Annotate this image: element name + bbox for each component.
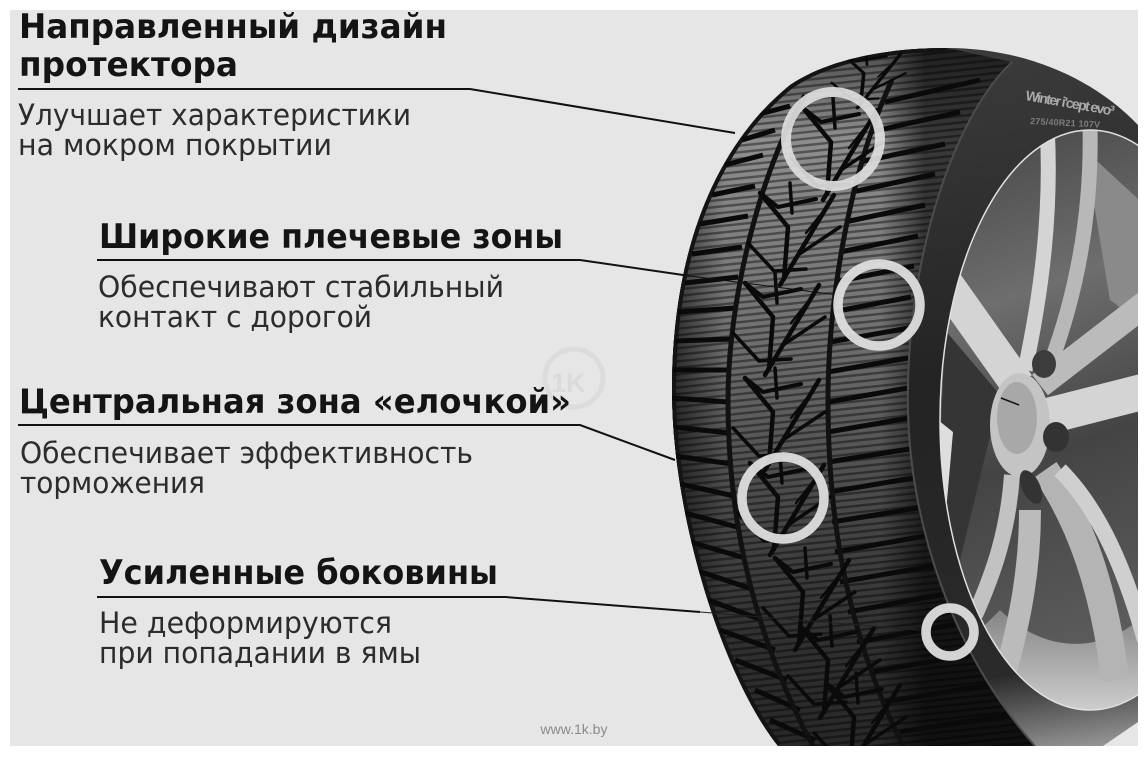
callout line 1 <box>18 89 735 133</box>
tire sidewall <box>672 48 1138 746</box>
website footer: www.1k.by <box>540 721 607 737</box>
heading 2: Широкие плечевые зоны <box>99 217 563 257</box>
block 1: directional tread <box>18 7 447 162</box>
block 3: center zone <box>19 382 571 500</box>
ring: center zone <box>742 457 824 539</box>
sidewall brand text: 275/40R21 107V <box>1030 116 1100 130</box>
callout line 4 <box>97 597 700 612</box>
description 4: Не деформируются <box>99 606 392 640</box>
outer tread edge <box>672 48 947 746</box>
center herringbone chevrons <box>733 47 906 757</box>
sidewall brand text <box>1026 90 1115 128</box>
callout line 2 on tire <box>690 276 838 295</box>
ring: tread design <box>786 92 880 186</box>
watermark logo <box>545 349 603 407</box>
heading 1: Направленный дизайн <box>19 7 447 47</box>
description 2: Обеспечивают стабильный <box>98 270 504 304</box>
description 2 second line: контакт с дорогой <box>98 300 372 334</box>
tread band <box>672 48 1034 746</box>
heading 1 second line: протектора <box>19 45 238 85</box>
watermark logo: 1K <box>551 368 586 398</box>
heading 3: Центральная зона «елочкой» <box>19 382 571 422</box>
sidewall bead line <box>908 62 1035 746</box>
alloy wheel <box>938 125 1148 720</box>
description 3: Обеспечивает эффективность <box>20 436 473 470</box>
sidewall brand text: Winter i'cept evo³ <box>1024 87 1116 119</box>
block 2: shoulder zones <box>98 217 563 334</box>
left shoulder grooves <box>672 106 815 740</box>
ring: shoulder zone <box>838 264 920 346</box>
callout line 3 <box>18 425 675 460</box>
circumferential grooves <box>728 95 815 750</box>
wheel hub and bolt holes <box>990 350 1069 507</box>
right shoulder grooves <box>830 78 986 734</box>
description 3 second line: торможения <box>20 466 205 500</box>
callout line 4 on tire <box>700 612 920 630</box>
description 4 second line: при попадании в ямы <box>99 636 421 670</box>
block 4: sidewalls <box>99 553 498 670</box>
description 1 second line: на мокром покрытии <box>18 128 332 162</box>
heading 4: Усиленные боковины <box>99 553 498 593</box>
callout line 2 <box>97 260 690 276</box>
ring: sidewall <box>926 608 974 656</box>
description 1: Улучшает характеристики <box>18 98 411 132</box>
